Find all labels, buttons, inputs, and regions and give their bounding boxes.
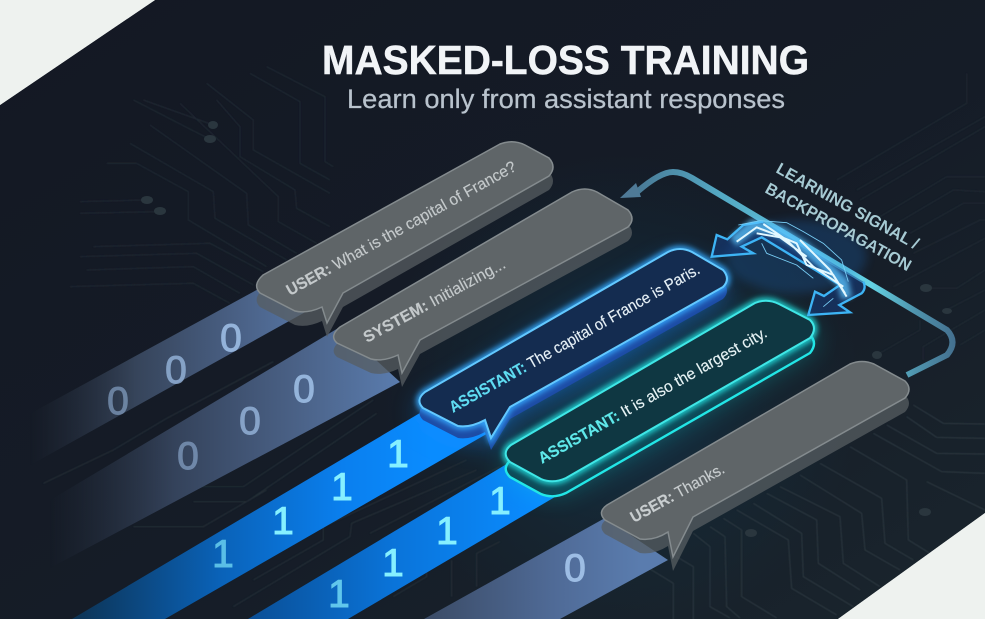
stripe: system, mask 0 xyxy=(0,327,400,590)
mask digits xyxy=(107,317,586,616)
stripe: user question, mask 0 xyxy=(0,287,327,482)
label: learning signal: BACKPROPAGATION xyxy=(762,180,914,275)
ones row three: 1 xyxy=(331,466,353,509)
bubble: assistant answer: ASSISTANT: The capital of France is Paris. xyxy=(447,261,703,416)
zeros row one xyxy=(107,317,242,423)
zeros row one: 0 xyxy=(165,349,187,392)
zeros row two xyxy=(177,368,315,478)
arrow: learning signal loop xyxy=(620,172,952,375)
bubble: system: SYSTEM: Initializing... xyxy=(361,256,509,347)
ones row three: 1 xyxy=(272,500,294,543)
zeros row two: 0 xyxy=(177,435,199,478)
bubble: user thanks: USER: Thanks. xyxy=(628,461,728,526)
ones row four: 1 xyxy=(382,542,404,585)
stripe: assistant answer, mask 1 xyxy=(72,410,490,619)
label: learning signal: LEARNING SIGNAL / xyxy=(773,160,922,253)
bubble: user question: USER: What is the capital of France? xyxy=(284,159,519,299)
zeros row two: 0 xyxy=(239,400,261,443)
ones row three: 1 xyxy=(212,533,234,576)
title: MASKED-LOSS TRAINING xyxy=(322,37,809,83)
bubble: user question xyxy=(257,142,553,337)
corner: top-left light xyxy=(0,0,155,105)
ones row four xyxy=(328,480,511,616)
corner: bottom-right light xyxy=(838,513,985,619)
zeros row two: 0 xyxy=(293,368,315,411)
ones row four: 1 xyxy=(328,573,350,616)
zeros row one: 0 xyxy=(220,317,242,360)
ones row three xyxy=(212,433,409,576)
stripe: assistant follow-up, mask 1 xyxy=(248,462,560,619)
zero row five: 0 xyxy=(564,547,586,590)
bubble: system xyxy=(334,189,632,387)
icon: branching arrows with lightning xyxy=(712,220,867,315)
background glow xyxy=(478,247,763,530)
ones row three: 1 xyxy=(387,433,409,476)
circuit nodes xyxy=(141,121,952,537)
zeros row one: 0 xyxy=(107,380,129,423)
subtitle: Learn only from assistant responses xyxy=(347,84,785,114)
mask stripes xyxy=(0,287,668,619)
bubble: user thanks xyxy=(601,362,909,571)
bubble: assistant follow-up xyxy=(506,301,814,496)
bubble: assistant follow-up: ASSISTANT: It is also the largest city. xyxy=(536,325,770,467)
stripe: user thanks, mask 0 xyxy=(424,518,668,619)
ones row four: 1 xyxy=(489,480,511,523)
ones row four: 1 xyxy=(436,510,458,553)
